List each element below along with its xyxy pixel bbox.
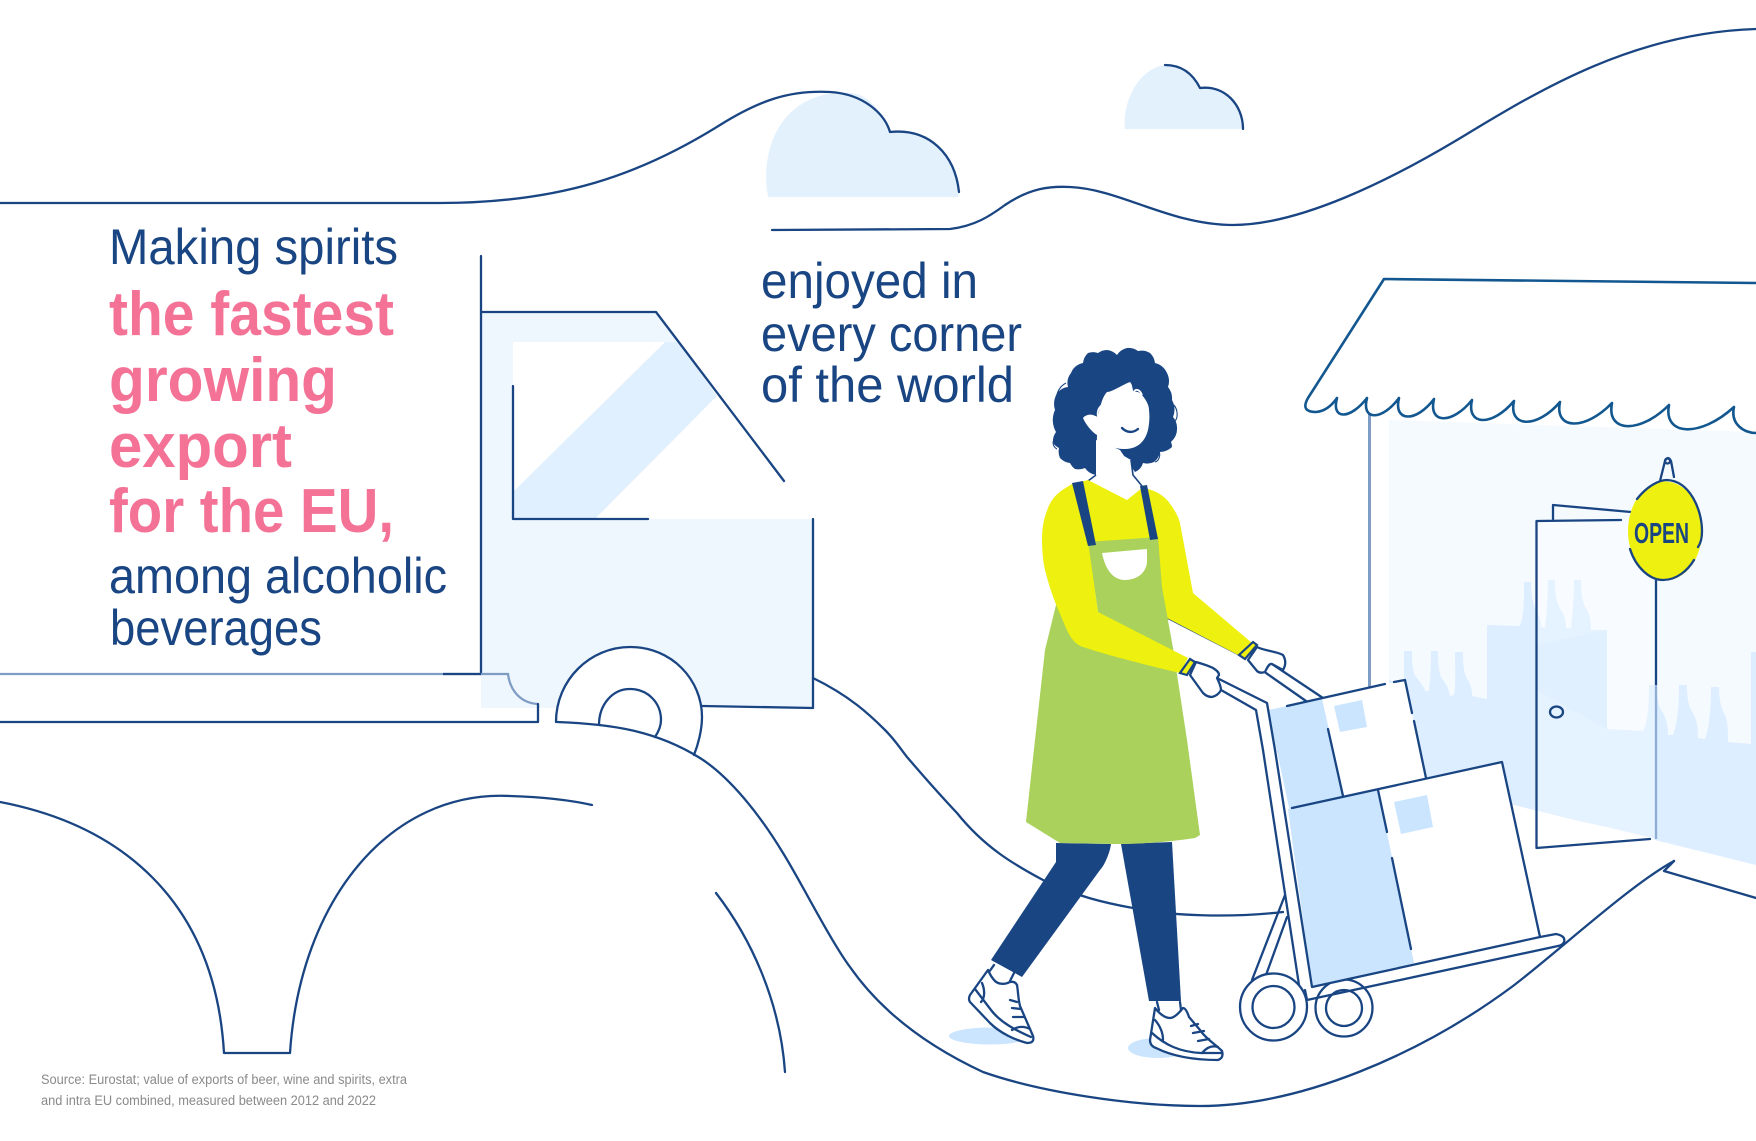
yellow top [1060, 480, 1252, 657]
window reflection [513, 342, 717, 519]
apron straps [1072, 481, 1158, 546]
cab fill [481, 312, 813, 708]
shop [1305, 279, 1756, 865]
cart frame [1217, 678, 1564, 1000]
face and neck [1083, 382, 1149, 500]
pink highlight: the fastest [109, 280, 394, 349]
truck outline [481, 256, 784, 674]
front arm sleeve [1042, 484, 1188, 673]
intro line: Making spirits [109, 219, 398, 275]
hill left arcs [0, 796, 592, 1053]
open sign [1628, 458, 1702, 580]
window [513, 342, 815, 519]
secondary text [761, 253, 1022, 413]
pink highlight: for the EU, [109, 477, 394, 546]
neck line [1088, 460, 1142, 486]
pink highlight [109, 280, 394, 546]
title text [109, 219, 447, 656]
pink highlight: export [109, 412, 292, 481]
small cloud [1125, 65, 1243, 129]
lower box [1288, 762, 1540, 987]
apron pocket [1102, 549, 1147, 580]
source note: and intra EU combined, measured between 2012 and 2022 [41, 1093, 376, 1108]
shoes [969, 965, 1222, 1060]
pink highlight: growing [109, 346, 337, 415]
hand truck with boxes [1168, 618, 1564, 1040]
right hand and cuff [1239, 642, 1285, 673]
road curve [557, 722, 1674, 1106]
large cloud and top hill line [0, 92, 959, 203]
foot shadows [949, 1028, 1188, 1058]
upper box [1268, 680, 1428, 812]
door [1536, 505, 1656, 848]
hill arc middle [716, 893, 785, 1072]
source note: Source: Eurostat; value of exports of beer, wine and spirits, extra [41, 1072, 407, 1087]
trousers [991, 842, 1181, 1001]
open sign: OPEN [1634, 518, 1689, 550]
awning [1305, 279, 1756, 433]
small wheel [1316, 980, 1372, 1036]
shop interior fill [1389, 420, 1756, 865]
left hand and cuff [1180, 659, 1221, 697]
ground line near shop [1664, 861, 1756, 898]
winding path [813, 678, 1283, 915]
wheel [556, 647, 702, 757]
green apron [1026, 537, 1200, 844]
shop post [1368, 414, 1371, 687]
title text: beverages [110, 600, 322, 656]
secondary text: every corner [761, 306, 1022, 362]
forehead curl [1098, 390, 1142, 417]
horizon line right [772, 29, 1756, 230]
smile [1122, 428, 1138, 432]
truck [0, 256, 815, 757]
closing lines: among alcoholic [109, 548, 447, 604]
back handle [1168, 618, 1323, 701]
big wheel [1240, 974, 1307, 1040]
hair [1053, 348, 1177, 475]
hair curls [1053, 383, 1177, 462]
secondary text: enjoyed in [761, 253, 978, 309]
secondary text: of the world [761, 357, 1014, 413]
bottles skyline silhouette [1389, 580, 1756, 865]
source note [41, 1072, 407, 1108]
woman [969, 348, 1285, 1060]
